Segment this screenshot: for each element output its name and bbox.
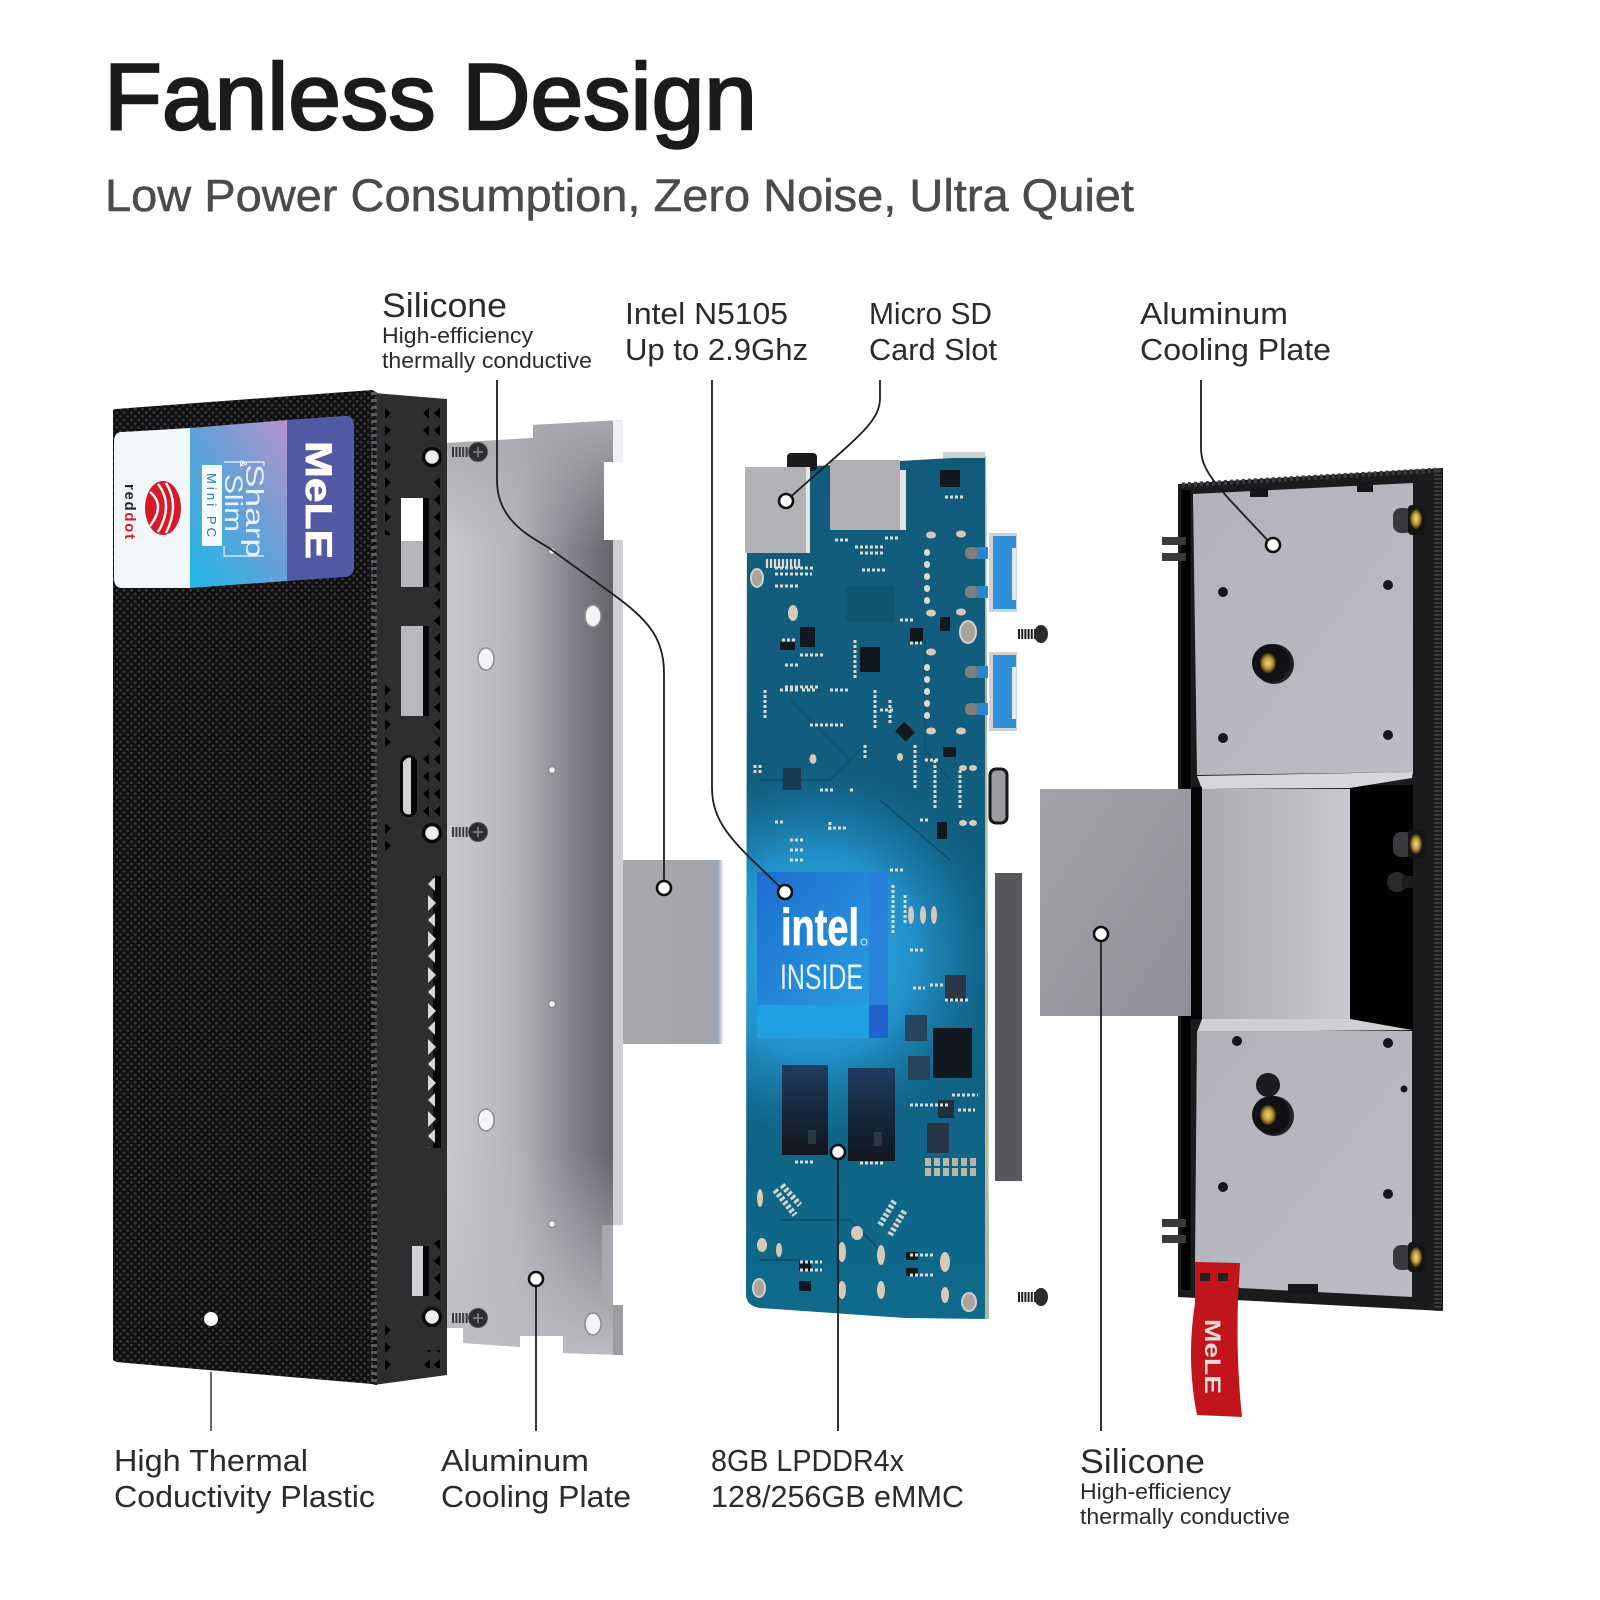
leader line: memory — [837, 1152, 839, 1431]
sticker badge: Mini PC: Mini PC — [204, 473, 219, 537]
label: Aluminum bottom — [441, 1443, 631, 1514]
brass nuts — [1252, 505, 1425, 1272]
case side face — [374, 393, 447, 1385]
component: red pull tab: MeLE — [1200, 1319, 1225, 1394]
component: side memory module edge — [995, 873, 1022, 1181]
sticker text: Sharp and Slim: Slim — [219, 474, 247, 532]
label: Silicone top — [382, 287, 592, 373]
component: aluminum cooling plate left — [446, 420, 623, 1360]
callout dot: case — [204, 1312, 218, 1326]
plate mounting holes — [478, 548, 601, 1335]
label: Silicone bottom — [1080, 1443, 1290, 1529]
label: Silicone bottom: thermally conductive — [1080, 1504, 1290, 1529]
port slots — [400, 498, 429, 1296]
subtitle: Low Power Consumption, Zero Noise, Ultra Quiet — [105, 170, 1135, 221]
logo: intel inside — [757, 872, 888, 1038]
leader line: aluminum left — [535, 1279, 537, 1431]
side tabs — [1162, 537, 1186, 1243]
ethernet port — [830, 452, 985, 530]
USB ports — [989, 533, 1017, 731]
component: silicone pad right — [1040, 787, 1202, 1019]
PCB pads — [757, 530, 977, 1303]
label: Silicone bottom: Silicone — [1080, 1443, 1205, 1481]
label: Aluminum top — [1140, 296, 1331, 367]
leader line: case — [210, 1372, 212, 1431]
label: Silicone top: thermally conductive — [382, 348, 592, 373]
USB contact posts — [965, 547, 988, 715]
label: memory: 8GB LPDDR4x — [711, 1443, 904, 1478]
logo: reddot: red dot — [121, 484, 138, 539]
component: silicone pad behind plate — [623, 860, 723, 1044]
sticker — [114, 416, 354, 588]
label: Aluminum top: Aluminum — [1140, 296, 1288, 331]
PCB mounting holes — [751, 569, 976, 1311]
frame — [1178, 468, 1443, 1311]
label: Silicone top: High-efficiency — [382, 323, 533, 348]
lower plate — [1195, 1031, 1412, 1297]
callout dots — [529, 494, 1280, 1286]
black bay — [1345, 785, 1413, 1030]
plate holes — [1218, 482, 1408, 1294]
label: memory — [711, 1443, 964, 1514]
upper plate — [1193, 483, 1413, 775]
label: Micro SD: Card Slot — [869, 332, 997, 367]
sticker text: Sharp and Slim: & — [237, 460, 248, 467]
sticker text: Sharp and Slim: Sharp — [240, 464, 268, 558]
leader line: Micro SD — [786, 380, 880, 501]
logo: intel inside: INSIDE — [780, 958, 863, 997]
label: Intel N5105 — [625, 296, 808, 367]
leader line: silicone bottom — [1100, 934, 1102, 1431]
folded middle flap — [1197, 772, 1413, 1032]
leader line: Intel N5105 — [712, 380, 785, 892]
label: Silicone top: Silicone — [382, 287, 507, 325]
logo: MeLE on sticker: MeLE — [298, 441, 339, 559]
leader line: aluminum right — [1201, 380, 1272, 545]
component: red pull tab — [1191, 1262, 1242, 1417]
logo: reddot — [121, 481, 181, 539]
RAM chips — [782, 1065, 895, 1161]
component: right cooling plate in black frame — [1162, 468, 1443, 1311]
label: Aluminum bottom: Cooling Plate — [441, 1479, 631, 1514]
label: Intel N5105: Up to 2.9Ghz — [625, 332, 808, 367]
leader line: silicone top — [497, 380, 664, 888]
case front mesh face — [113, 390, 377, 1385]
sticker badge: Mini PC — [202, 465, 222, 546]
label: High Thermal: High Thermal — [114, 1443, 308, 1478]
screw holes in case — [424, 448, 440, 1326]
component: black thermal plastic case — [113, 390, 447, 1385]
sticker text: Sharp and Slim — [219, 460, 268, 558]
label: High Thermal: Coductivity Plastic — [114, 1479, 375, 1514]
logo: intel inside: intel — [781, 899, 859, 957]
label: Aluminum bottom: Aluminum — [441, 1443, 589, 1478]
component: motherboard PCB — [745, 450, 1017, 1325]
label: High Thermal — [114, 1443, 375, 1514]
label: Micro SD: Micro SD — [869, 296, 992, 331]
label: Silicone bottom: High-efficiency — [1080, 1479, 1231, 1504]
PCB small components — [755, 497, 978, 1275]
audio jack and SD block — [745, 453, 817, 568]
USB-C port — [990, 769, 1007, 823]
infographic: fanless design exploded view — [108, 60, 1443, 1528]
label: memory: 128/256GB eMMC — [711, 1479, 964, 1514]
screws left — [452, 442, 488, 1328]
label: Aluminum top: Cooling Plate — [1140, 332, 1331, 367]
label: Micro SD — [869, 296, 997, 367]
PCB chips — [780, 470, 972, 1291]
screws middle — [1018, 625, 1048, 1306]
title: Fanless Design — [104, 44, 757, 149]
label: Intel N5105: Intel N5105 — [625, 296, 788, 331]
